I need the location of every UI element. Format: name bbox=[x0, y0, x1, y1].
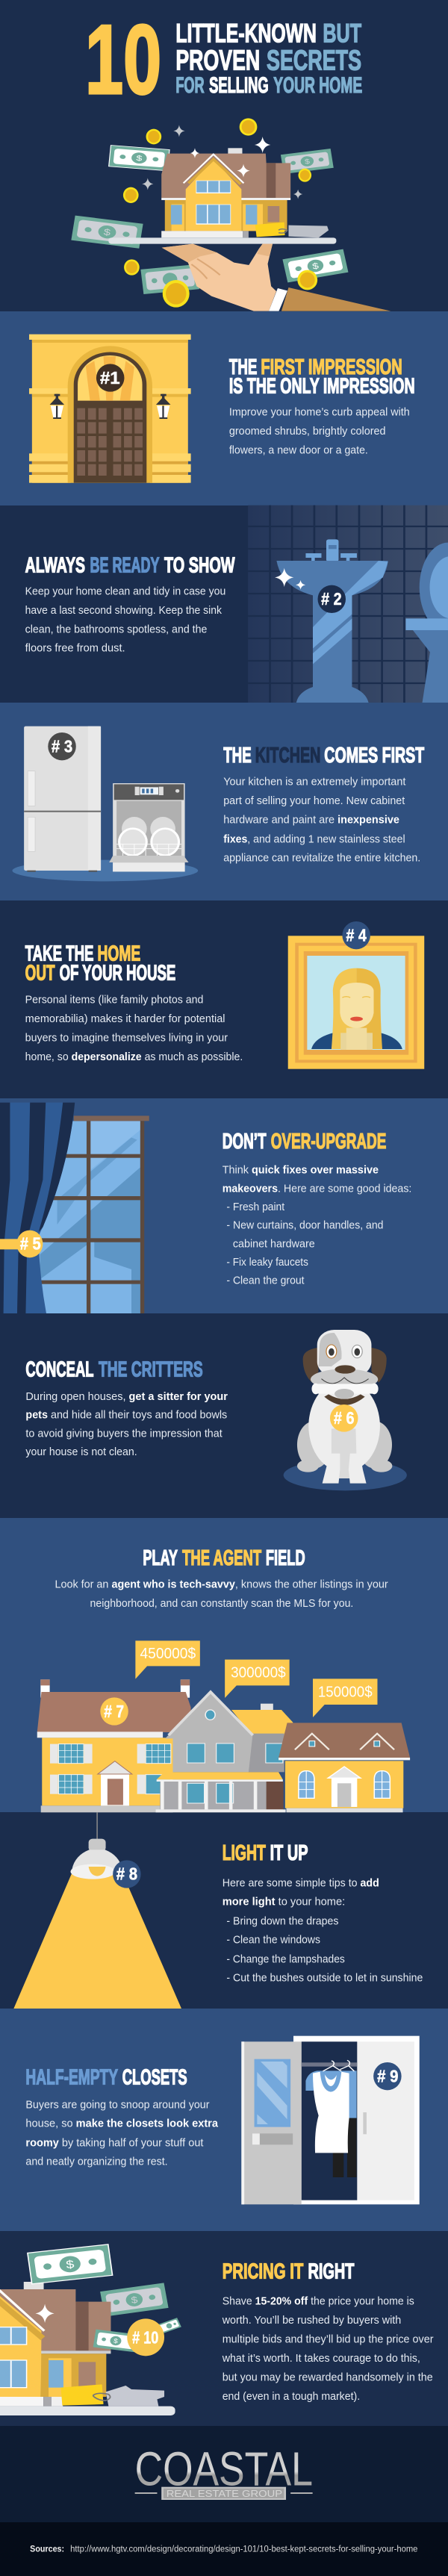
illustration: money around bills: $ bbox=[304, 158, 311, 166]
text: quick fixes list: - New curtains, door handles, and bbox=[226, 1220, 384, 1231]
text: depersonalize body: home, so depersonalize as much as possible. bbox=[25, 1051, 243, 1063]
illustration: window bbox=[37, 1116, 149, 1313]
panel: tip 10 and footer bbox=[0, 2244, 433, 2554]
text: closets body: house, so make the closets look extra bbox=[25, 2118, 218, 2129]
callout: price 450000$: 450000$ bbox=[140, 1645, 196, 1662]
heading: pricing it right: PRICING IT bbox=[223, 2259, 303, 2283]
logo: Coastal Real Estate Group: REAL ESTATE GROUP bbox=[167, 2489, 282, 2500]
title: YOUR HOME bbox=[273, 72, 362, 98]
text: always ready body bbox=[25, 586, 225, 654]
icon: badge #8: # 8 bbox=[116, 1864, 137, 1884]
heading: don't over-upgrade: DON’T bbox=[223, 1129, 267, 1154]
text: critters body: pets and hide all their toys and food bowls bbox=[25, 1410, 227, 1421]
heading: half-empty closets: HALF-EMPTY bbox=[25, 2065, 118, 2089]
icon: badge #6: # 6 bbox=[334, 1409, 355, 1428]
text: depersonalize body: buyers to imagine themselves living in your bbox=[25, 1032, 228, 1044]
heading: first impression bbox=[229, 355, 415, 398]
panel: tip 8 text and tip 9 bbox=[25, 1877, 423, 2204]
icon: badge #7 bbox=[100, 1697, 128, 1726]
panel: hero bbox=[71, 5, 391, 311]
callout: price 150000$: 150000$ bbox=[318, 1684, 373, 1700]
icon: badge #6 bbox=[330, 1404, 358, 1432]
text: closets body: Buyers are going to snoop around your bbox=[25, 2099, 209, 2111]
text: kitchen body bbox=[223, 777, 420, 864]
icon: badge #10: # 10 bbox=[132, 2328, 158, 2348]
text: depersonalize body bbox=[25, 994, 243, 1063]
text: first impression body bbox=[229, 407, 410, 456]
panel: tip 5 and tip 6 bbox=[0, 1103, 411, 1490]
icon: badge #9: # 9 bbox=[377, 2067, 398, 2086]
text: sources: Sources: bbox=[30, 2544, 64, 2554]
text: light tips list bbox=[223, 1877, 423, 1984]
icon: badge #4 bbox=[342, 921, 370, 949]
illustration: house with money bbox=[0, 2244, 181, 2415]
icon: badge #1: #1 bbox=[100, 369, 120, 388]
heading: play the agent field: THE AGENT bbox=[182, 1546, 261, 1570]
text: critters body: your house is not clean. bbox=[25, 1446, 137, 1458]
title: BUT bbox=[323, 19, 361, 49]
text: light tips list: Here are some simple tips to add bbox=[223, 1877, 379, 1889]
illustration: right house bbox=[279, 1723, 410, 1812]
text: light tips list: - Bring down the drapes bbox=[226, 1915, 339, 1927]
icon: badge #5 bbox=[0, 1231, 43, 1257]
icon: badge #9 bbox=[373, 2062, 402, 2090]
heading: first impression: THE bbox=[229, 355, 257, 379]
heading: conceal the critters: THE CRITTERS bbox=[99, 1357, 203, 1381]
icon: badge #3: # 3 bbox=[52, 737, 72, 756]
logo: Coastal Real Estate Group bbox=[135, 2442, 313, 2500]
text: depersonalize body: memorabilia) makes it harder for potential bbox=[25, 1013, 225, 1025]
text: critters body bbox=[25, 1391, 228, 1458]
icon: badge #4: # 4 bbox=[346, 926, 367, 945]
heading: conceal the critters: CONCEAL bbox=[25, 1357, 94, 1381]
illustration: money around bills: $ bbox=[311, 261, 320, 271]
icon: badge #8 bbox=[113, 1860, 141, 1888]
text: pricing body: what it’s worth. It takes courage to do this, bbox=[222, 2353, 420, 2365]
text: pricing body: end (even in a tough market). bbox=[223, 2391, 360, 2403]
heading: always be ready bbox=[25, 553, 235, 577]
heading: always be ready: ALWAYS bbox=[25, 553, 85, 577]
heading: take the home out bbox=[25, 942, 175, 985]
heading: take the home out: OUT bbox=[25, 961, 55, 985]
heading: pricing it right: RIGHT bbox=[308, 2259, 355, 2283]
text: critters body: to avoid giving buyers the impression that bbox=[25, 1428, 223, 1440]
illustration: fridge and dishwasher bbox=[12, 727, 198, 881]
callout: price 300000$: 300000$ bbox=[231, 1664, 286, 1681]
illustration: curtain bbox=[0, 1103, 75, 1313]
panel: tip 7 and tip 8 bbox=[13, 1546, 410, 2009]
heading: play the agent field: FIELD bbox=[266, 1546, 305, 1570]
illustration: house with money: $ bbox=[65, 2257, 75, 2271]
heading: take the home out: TAKE THE bbox=[25, 942, 94, 965]
title: PROVEN bbox=[175, 44, 260, 76]
heading: conceal the critters bbox=[25, 1357, 203, 1381]
heading: half-empty closets: CLOSETS bbox=[122, 2065, 187, 2089]
heading: play the agent field bbox=[143, 1546, 305, 1570]
text: always ready body: floors free from dust. bbox=[25, 643, 125, 654]
text: first impression body: flowers, a new door or a gate. bbox=[229, 445, 368, 456]
heading: kitchen bbox=[223, 743, 424, 768]
title: 10 bbox=[85, 5, 161, 115]
text: closets body bbox=[25, 2099, 218, 2168]
illustration: dog bbox=[284, 1330, 407, 1490]
callout: price 450000$ bbox=[135, 1640, 200, 1679]
illustration: money around bills: $ bbox=[103, 228, 111, 238]
heading: kitchen: THE bbox=[223, 743, 252, 768]
icon: left lantern bbox=[50, 394, 64, 419]
text: quick fixes list bbox=[223, 1165, 411, 1287]
text: kitchen body: Your kitchen is an extremely important bbox=[223, 777, 406, 788]
illustration: front door bbox=[29, 335, 191, 483]
heading: light it up: IT UP bbox=[270, 1841, 308, 1864]
heading: always be ready: BE READY bbox=[90, 553, 160, 577]
text: always ready body: Keep your home clean and tidy in case you bbox=[25, 586, 225, 597]
text: light tips list: more light to your home: bbox=[223, 1897, 345, 1908]
heading: light it up: LIGHT bbox=[223, 1841, 266, 1864]
icon: badge #7: # 7 bbox=[104, 1702, 124, 1722]
panel: tip 1 and tip 2 bbox=[25, 335, 448, 703]
icon: badge #5: # 5 bbox=[20, 1234, 41, 1254]
text: quick fixes list: makeovers. Here are some good ideas: bbox=[223, 1183, 411, 1195]
icon: right lantern bbox=[156, 394, 170, 419]
text: agent body bbox=[55, 1579, 388, 1610]
illustration: house on tray bbox=[108, 148, 336, 244]
text: light tips list: - Change the lampshades bbox=[226, 1953, 345, 1965]
text: quick fixes list: - Fresh paint bbox=[226, 1201, 285, 1213]
icon: badge #3 bbox=[48, 732, 76, 760]
text: quick fixes list: - Fix leaky faucets bbox=[226, 1257, 308, 1269]
text: depersonalize body: Personal items (like family photos and bbox=[25, 994, 203, 1006]
callout: price 300000$ bbox=[225, 1660, 290, 1698]
illustration: bathroom tiles bbox=[248, 505, 448, 703]
text: first impression body: groomed shrubs, brightly colored bbox=[229, 426, 386, 438]
text: pricing body: Shave 15-20% off the price your home is bbox=[223, 2296, 414, 2307]
text: agent body: Look for an agent who is tech-savvy, knows the other listings in your bbox=[55, 1579, 388, 1590]
text: light tips list: - Clean the windows bbox=[226, 1935, 320, 1946]
illustration: money around bills bbox=[71, 118, 348, 294]
text: kitchen body: part of selling your home. New cabinet bbox=[223, 795, 405, 807]
text: closets body: and neatly organizing the rest. bbox=[25, 2156, 168, 2168]
illustration: hanging lamp bbox=[13, 1812, 181, 2009]
illustration: hand holding tray bbox=[162, 244, 391, 311]
text: quick fixes list: - Clean the grout bbox=[226, 1275, 305, 1287]
title bbox=[85, 5, 362, 115]
heading: always be ready: TO SHOW bbox=[164, 553, 235, 577]
text: quick fixes list: Think quick fixes over massive bbox=[223, 1165, 379, 1176]
title: LITTLE-KNOWN bbox=[175, 19, 317, 49]
illustration: closet bbox=[241, 2036, 420, 2204]
illustration: money around bills: $ bbox=[136, 154, 143, 163]
title: SELLING bbox=[209, 72, 269, 98]
text: agent body: neighborhood, and can constantly scan the MLS for you. bbox=[90, 1598, 353, 1610]
text: quick fixes list: cabinet hardware bbox=[233, 1238, 315, 1250]
logo: Coastal Real Estate Group: COASTAL bbox=[135, 2442, 313, 2495]
illustration: left house bbox=[37, 1679, 191, 1812]
text: always ready body: have a last second showing. Keep the sink bbox=[25, 605, 222, 617]
text: kitchen body: hardware and paint are inexpensive bbox=[223, 815, 399, 826]
title: SECRETS bbox=[267, 44, 361, 76]
icon: badge #2 bbox=[318, 585, 346, 613]
text: kitchen body: fixes, and adding 1 new stainless steel bbox=[223, 833, 405, 845]
illustration: framed portrait bbox=[288, 921, 424, 1069]
icon: badge #2: # 2 bbox=[321, 590, 342, 609]
icon: badge #10 bbox=[127, 2318, 164, 2356]
callout: price 150000$ bbox=[313, 1679, 377, 1717]
text: kitchen body: appliance can revitalize the entire kitchen. bbox=[223, 853, 420, 864]
heading: play the agent field: PLAY bbox=[143, 1546, 178, 1570]
illustration: sink bbox=[275, 539, 388, 703]
heading: take the home out: HOME bbox=[97, 942, 140, 965]
text: first impression body: Improve your home’s curb appeal with bbox=[229, 407, 410, 418]
illustration: house with money: $ bbox=[130, 2295, 139, 2306]
illustration: toilet bbox=[405, 543, 448, 703]
title: FOR bbox=[175, 72, 205, 98]
illustration: middle house bbox=[156, 1691, 293, 1812]
illustration: house with money: $ bbox=[113, 2338, 119, 2345]
heading: kitchen: KITCHEN bbox=[255, 743, 320, 768]
icon: badge #1 bbox=[96, 364, 124, 392]
text: critters body: During open houses, get a sitter for your bbox=[25, 1391, 228, 1403]
text: closets body: roomy by taking half of your stuff out bbox=[25, 2137, 204, 2149]
panel: tip 3 and tip 4 bbox=[12, 727, 424, 1069]
text: pricing body bbox=[222, 2296, 433, 2403]
heading: don't over-upgrade bbox=[223, 1129, 386, 1154]
heading: take the home out: OF YOUR HOUSE bbox=[60, 961, 175, 985]
text: pricing body: worth. You’ll be rushed by buyers with bbox=[222, 2315, 401, 2327]
text: always ready body: clean, the bathrooms spotless, and the bbox=[25, 623, 207, 635]
